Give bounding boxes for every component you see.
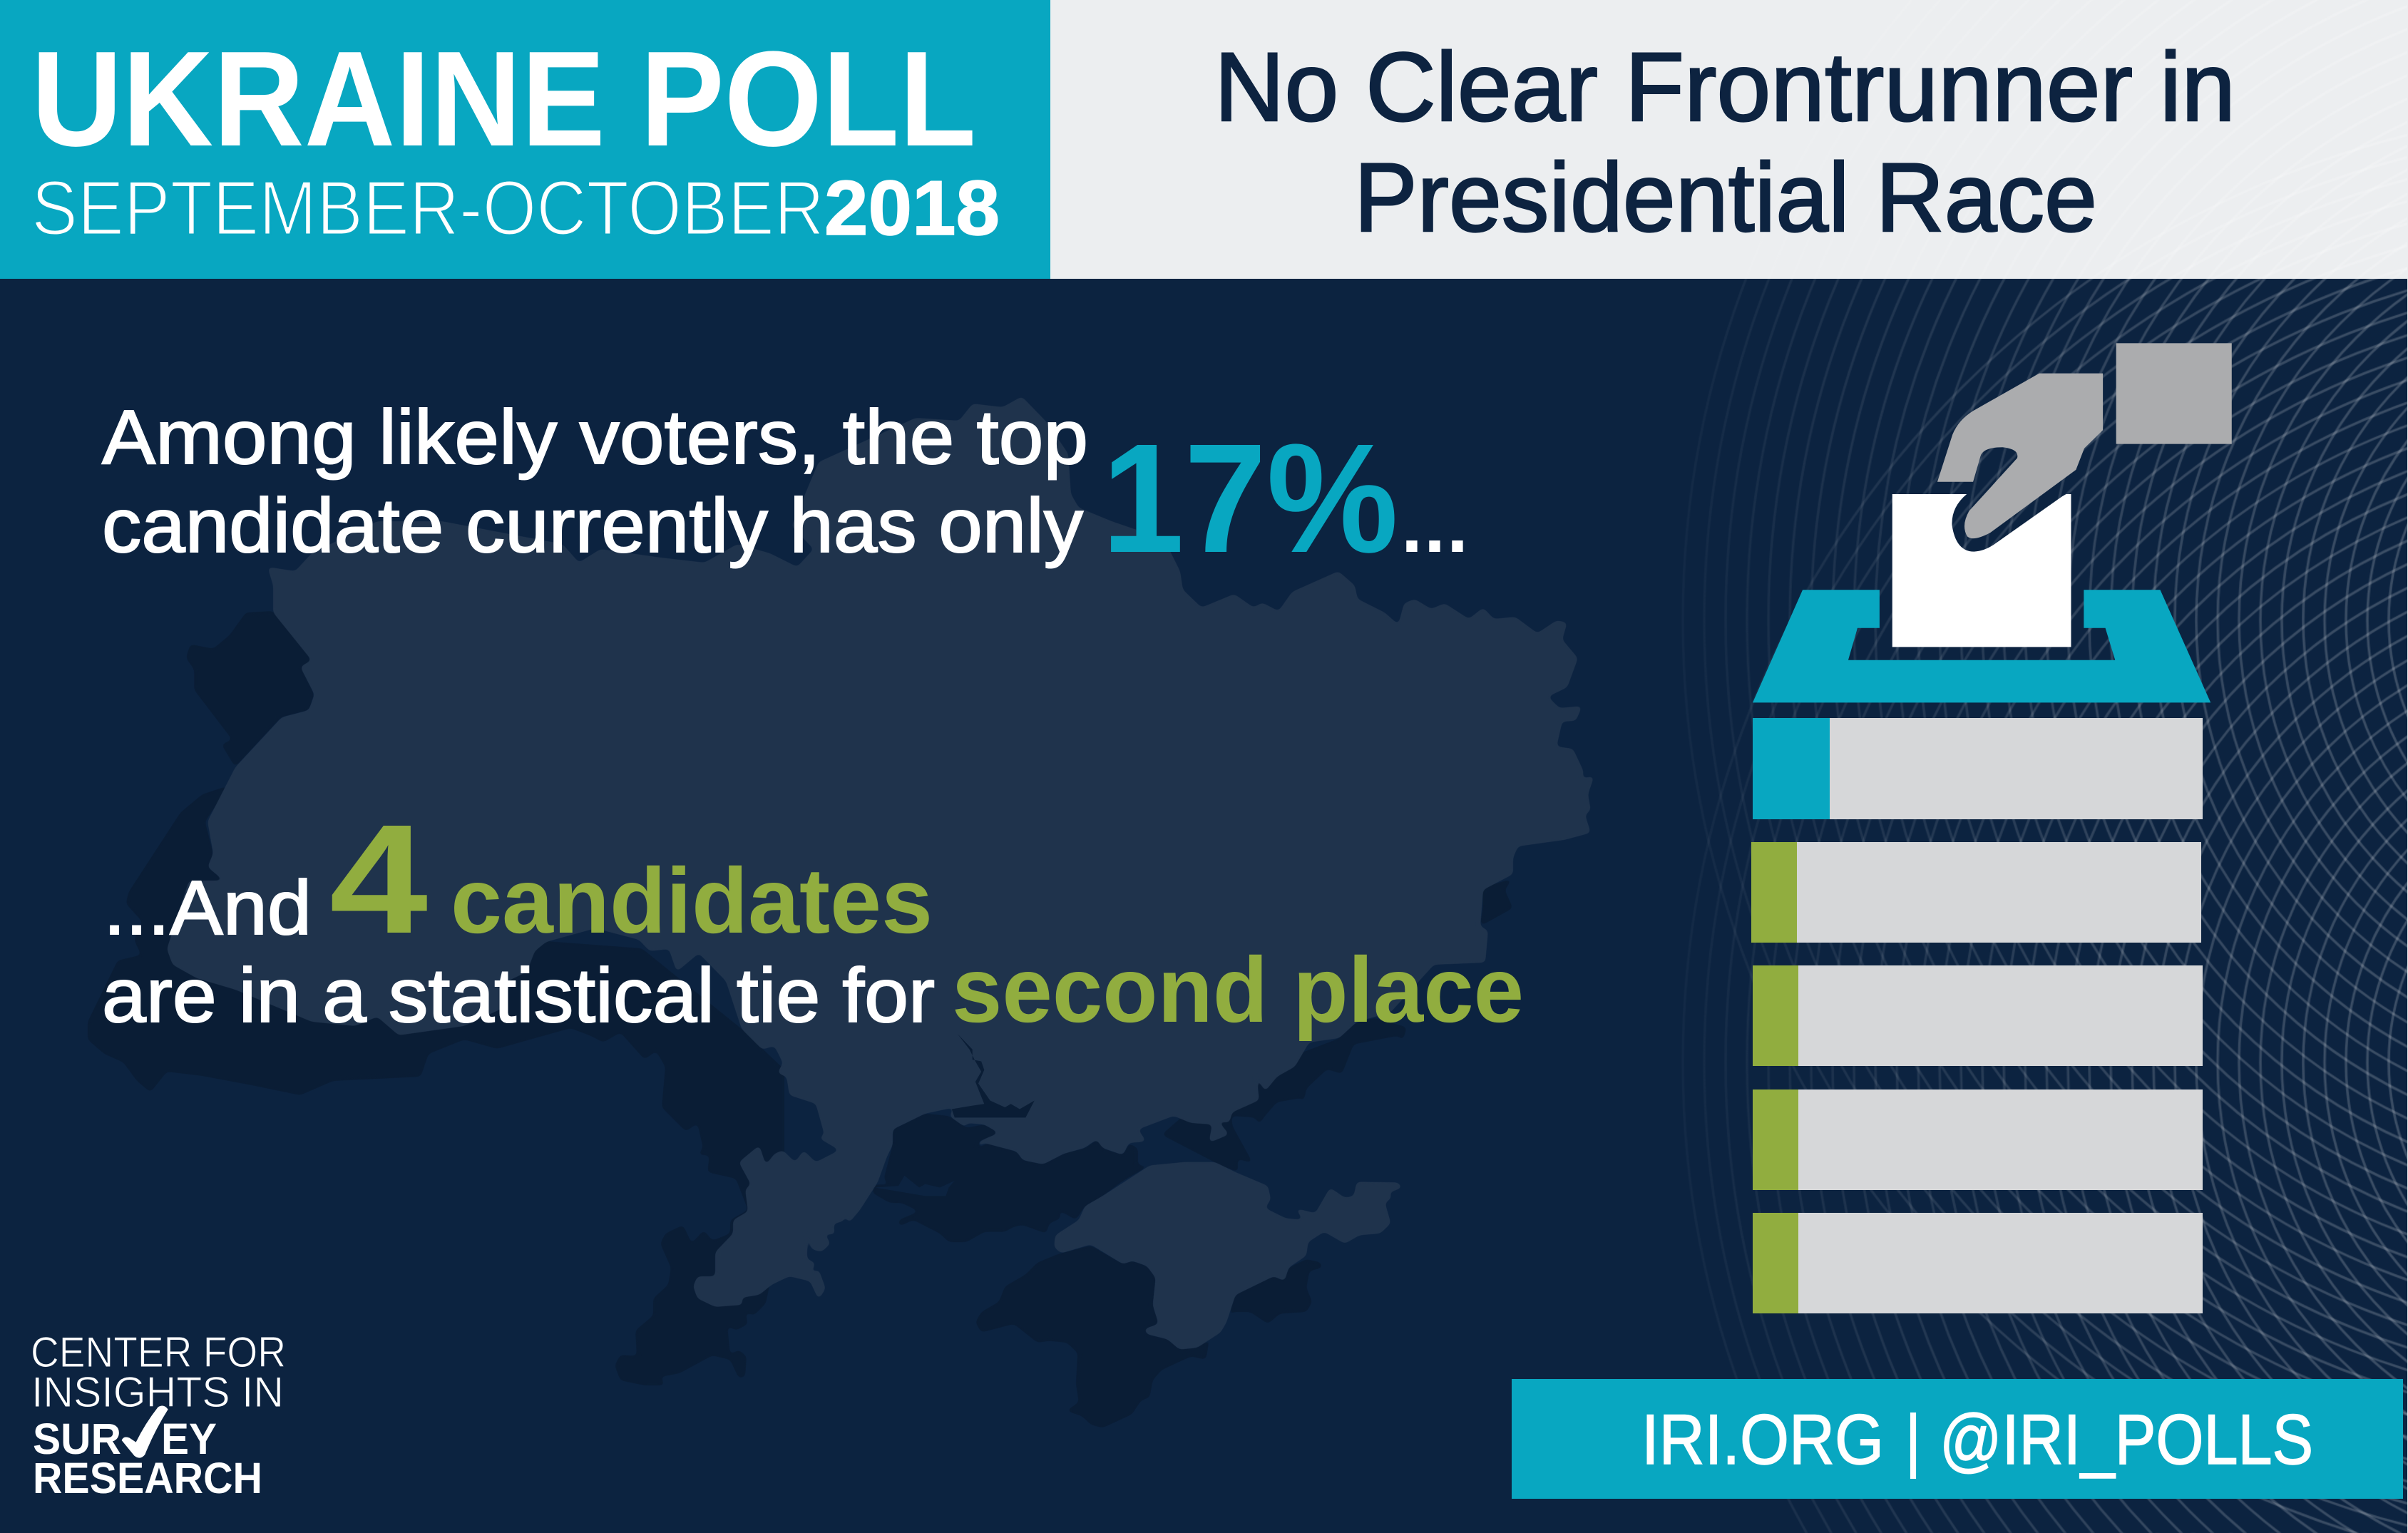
icon: sleeve cuff [2116, 343, 2232, 444]
bar chart: candidate support [1751, 718, 2203, 1313]
subheading: date: SEPTEMBER-OCTOBER [31, 165, 824, 252]
panel: footer links [1512, 1379, 2403, 1499]
heading: Ukraine Poll: UKRAINE POLL [31, 24, 976, 175]
label: candidates: candidates [451, 848, 933, 953]
bar: second candidate [1751, 842, 2201, 943]
bar: top candidate [1753, 718, 2203, 819]
text block: four candidates tied: ...And [103, 864, 312, 950]
panel: header right [1050, 0, 2408, 279]
map of Ukraine [88, 396, 1594, 1428]
icon: check mark [122, 1405, 168, 1458]
logo: Center for Insights in Survey Research: EY [161, 1415, 217, 1463]
title: Presidential Race [1354, 143, 2097, 252]
label: second place: second place [952, 938, 1524, 1042]
logo: Center for Insights in Survey Research: INSIGHTS IN [31, 1368, 284, 1416]
text block: four candidates tied [102, 793, 1524, 1042]
line: statistical tie: are in a statistical tie for [102, 952, 935, 1038]
ellipsis: ... [1401, 482, 1468, 568]
title [1214, 33, 2235, 252]
logo: Center for Insights in Survey Research: SUR [33, 1415, 121, 1463]
bar: fifth candidate [1753, 1213, 2203, 1313]
subheading: date: 2018 [824, 165, 1000, 252]
text block: top candidate 17% [102, 394, 1468, 585]
bar: fourth candidate [1753, 1089, 2203, 1190]
statistic: 4: 4 [329, 793, 428, 966]
icon: hand [1937, 374, 2103, 538]
text: website: IRI.ORG [1641, 1400, 1884, 1479]
icon: ballot box lid [1753, 590, 2210, 702]
statistic: 17%: 17% [1102, 412, 1398, 585]
icon: hand placing ballot in box [1753, 343, 2232, 702]
bar: third candidate [1753, 965, 2203, 1066]
text block: top candidate 17%: Among likely voters, the top [102, 394, 1088, 480]
logo: Center for Insights in Survey Research: CENTER FOR [31, 1328, 286, 1376]
text block: top candidate 17%: candidate currently has only [102, 482, 1083, 568]
text: divider: | [1904, 1400, 1922, 1479]
icon: ballot paper [1892, 494, 2071, 647]
title: No Clear Frontrunner in [1214, 33, 2235, 142]
logo: Center for Insights in Survey Research: RESEARCH [33, 1454, 262, 1502]
logo: Center for Insights in Survey Research [31, 1328, 286, 1502]
moire line pattern [1640, 279, 2408, 1533]
panel: header left [0, 0, 1050, 279]
text: handle: @IRI_POLLS [1940, 1400, 2313, 1479]
